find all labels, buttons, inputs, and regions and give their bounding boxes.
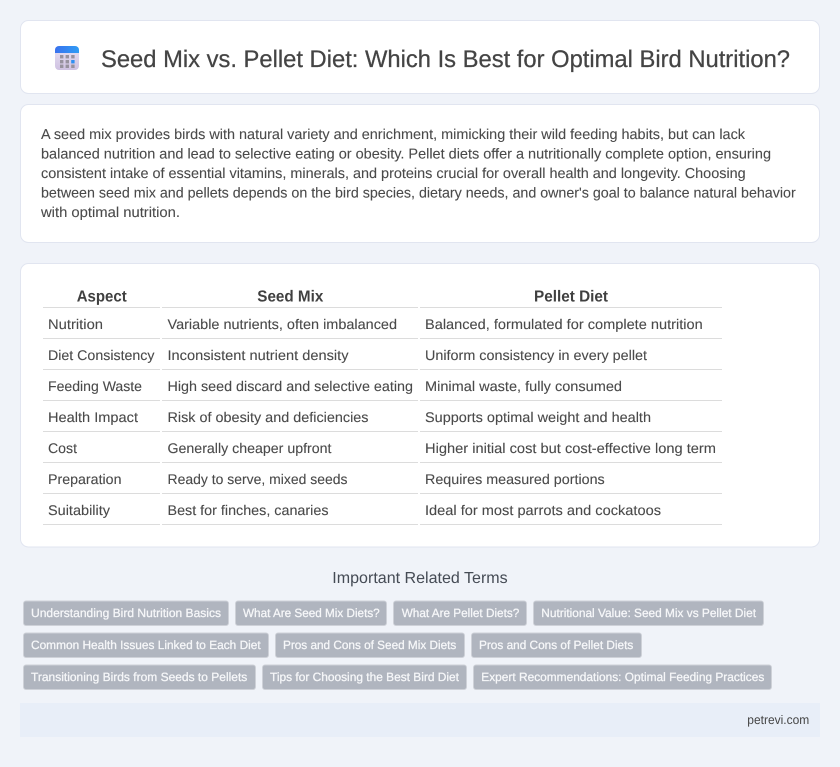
- table header row: Seed Mix: [257, 289, 323, 306]
- tag: pros and cons of pellet diets: Pros and Cons of Pellet Diets: [479, 638, 633, 652]
- row: health impact: Supports optimal weight and health: [425, 409, 651, 425]
- panel: comparison table: [20, 264, 820, 547]
- tag: tips for choosing: Tips for Choosing the Best Bird Diet: [270, 670, 460, 684]
- row: nutrition: Variable nutrients, often imbalanced: [168, 316, 397, 332]
- intro paragraph: with optimal nutrition.: [40, 205, 180, 221]
- row: suitability: Suitability: [48, 502, 110, 518]
- row: cost: Cost: [48, 440, 77, 456]
- footer site name: petrevi.com: [747, 713, 809, 727]
- tag: what are pellet diets: [394, 601, 526, 626]
- tag: expert recommendations: [474, 665, 772, 690]
- row: health impact: Health Impact: [48, 409, 138, 425]
- tag: pros and cons of pellet diets: [472, 633, 642, 658]
- row: diet consistency: Inconsistent nutrient density: [168, 347, 348, 363]
- tag: what are pellet diets: What Are Pellet Diets?: [402, 606, 520, 620]
- row: suitability: [43, 502, 722, 525]
- table header row: Pellet Diet: [534, 289, 609, 306]
- intro paragraph: between seed mix and pellets depends on the bird species, dietary needs, and owner's goal to balance natural behavior: [41, 186, 796, 202]
- intro paragraph: balanced nutrition and lead to selective eating or obesity. Pellet diets offer a nutritionally complete option, ensuring: [41, 146, 771, 162]
- row: preparation: Preparation: [48, 471, 122, 487]
- row: feeding waste: [43, 378, 722, 401]
- tag: nutritional value: [534, 601, 764, 626]
- row: health impact: Risk of obesity and deficiencies: [168, 409, 368, 425]
- row: diet consistency: Diet Consistency: [48, 347, 154, 363]
- panel: introduction: [20, 104, 820, 242]
- row: health impact: [43, 409, 722, 432]
- related term tags: [24, 601, 772, 690]
- row: diet consistency: [43, 347, 722, 370]
- row: preparation: Ready to serve, mixed seeds: [168, 471, 348, 487]
- intro paragraph: consistent intake of essential vitamins, minerals, and proteins crucial for overall health and longevity. Choosing: [41, 166, 746, 182]
- row: cost: [43, 440, 722, 463]
- row: cost: Higher initial cost but cost-effective long term: [425, 440, 716, 456]
- panel: header: [20, 20, 820, 94]
- row: preparation: [43, 471, 722, 494]
- row: cost: Generally cheaper upfront: [168, 440, 332, 456]
- intro paragraph: [40, 127, 796, 221]
- tag: transitioning birds: [24, 665, 256, 690]
- row: diet consistency: Uniform consistency in every pellet: [425, 347, 647, 363]
- intro paragraph: A seed mix provides birds with natural variety and enrichment, mimicking their wild feeding habits, but can lack: [41, 127, 746, 143]
- row: feeding waste: Minimal waste, fully consumed: [425, 378, 622, 394]
- footer: [20, 703, 820, 737]
- row: suitability: Best for finches, canaries: [168, 502, 328, 518]
- heading: important related terms: Important Related Terms: [332, 570, 508, 587]
- tag: what are seed mix diets: What Are Seed Mix Diets?: [243, 606, 380, 620]
- table header row: [43, 289, 722, 308]
- tag: tips for choosing: [262, 665, 466, 690]
- row: nutrition: [43, 316, 722, 339]
- icon: calendar: [55, 46, 79, 70]
- row: feeding waste: Feeding Waste: [48, 378, 142, 394]
- row: nutrition: Balanced, formulated for complete nutrition: [425, 316, 703, 332]
- row: suitability: Ideal for most parrots and cockatoos: [425, 502, 661, 518]
- tag: understanding bird nutrition basics: [24, 601, 228, 626]
- tag: expert recommendations: Expert Recommendations: Optimal Feeding Practices: [481, 670, 764, 684]
- row: nutrition: Nutrition: [48, 316, 103, 332]
- tag: common health issues: Common Health Issues Linked to Each Diet: [31, 638, 261, 652]
- tag: nutritional value: Nutritional Value: Seed Mix vs Pellet Diet: [541, 606, 757, 620]
- tag: common health issues: [24, 633, 268, 658]
- row: feeding waste: High seed discard and selective eating: [168, 378, 413, 394]
- tag: pros and cons of seed mix diets: [276, 633, 464, 658]
- row: preparation: Requires measured portions: [425, 471, 605, 487]
- title: Seed Mix vs. Pellet Diet: Which Is Best for Optimal Bird Nutrition?: [101, 46, 790, 73]
- tag: transitioning birds: Transitioning Birds from Seeds to Pellets: [31, 670, 247, 684]
- tag: what are seed mix diets: [236, 601, 386, 626]
- tag: understanding bird nutrition basics: Understanding Bird Nutrition Basics: [31, 606, 221, 620]
- table header row: Aspect: [77, 289, 127, 306]
- tag: pros and cons of seed mix diets: Pros and Cons of Seed Mix Diets: [283, 638, 456, 652]
